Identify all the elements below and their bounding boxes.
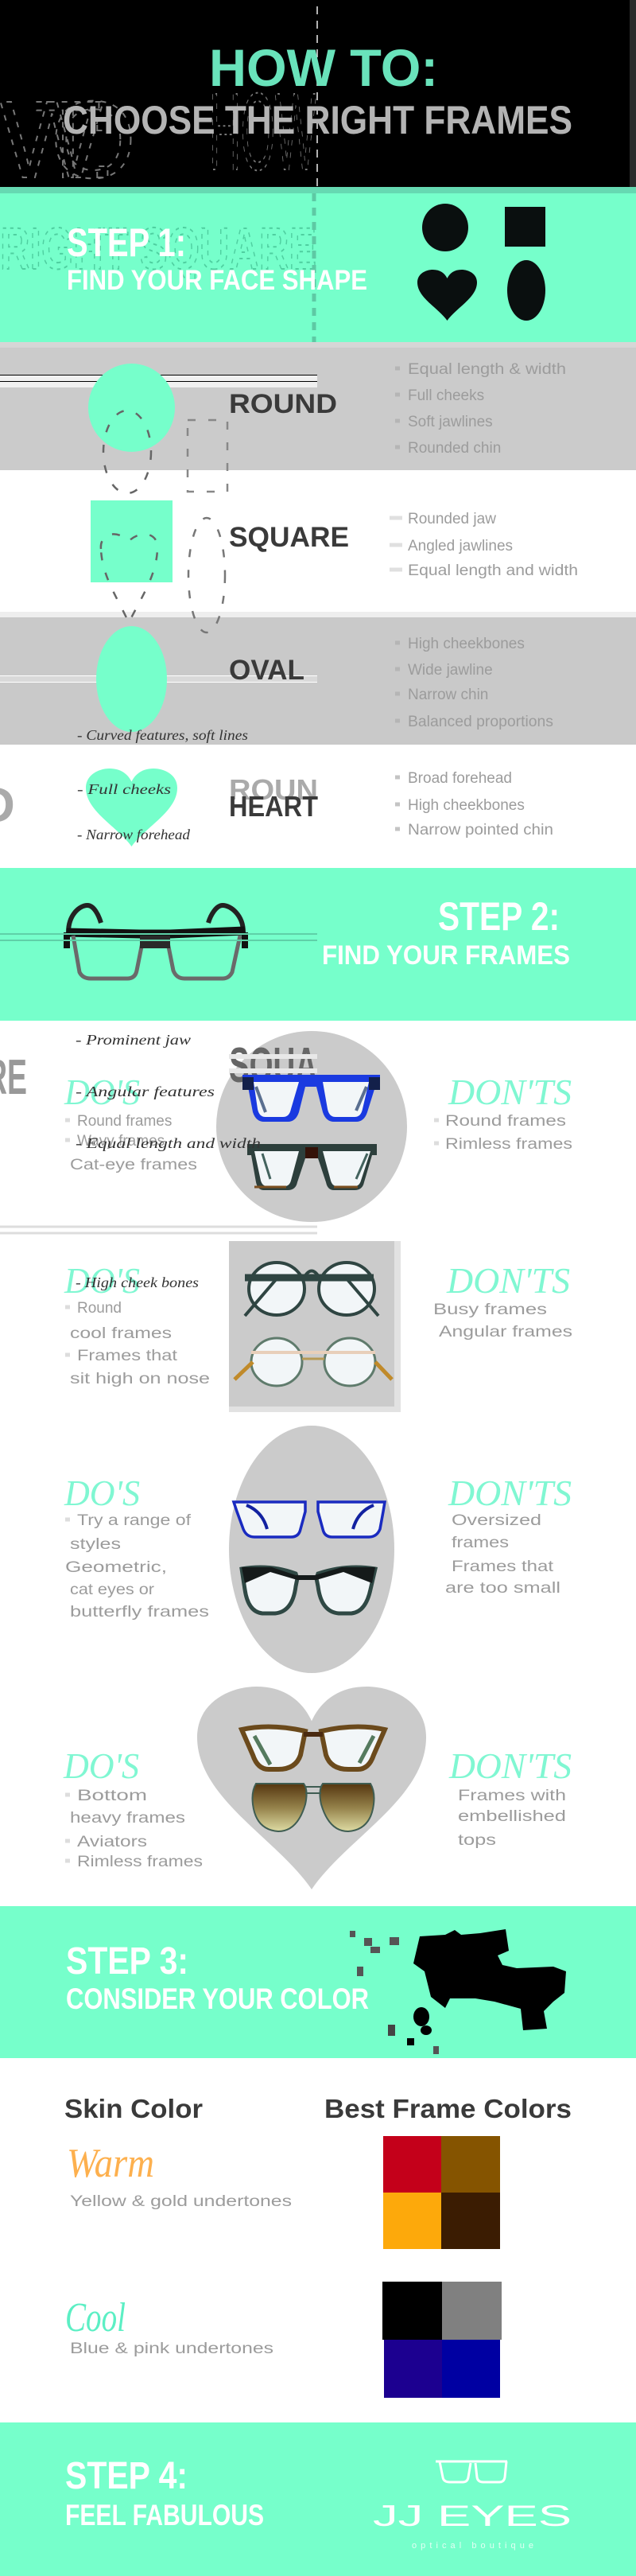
list: donts: Oversized: [452, 1512, 541, 1529]
list: donts: Rimless frames: [445, 1136, 572, 1153]
list: dos: cat eyes or: [70, 1582, 155, 1598]
label: warm: Warm: [67, 2141, 154, 2186]
list: heart traits: Broad forehead: [408, 770, 512, 787]
list: donts: Frames that: [452, 1558, 554, 1575]
heading: donts: DON'TS: [448, 1473, 572, 1513]
list: donts: [458, 1788, 566, 1849]
heading: step 4: STEP 4:: [65, 2455, 188, 2497]
shape: gray heart: [197, 1687, 426, 1889]
subheading: consider your color: CONSIDER YOUR COLOR: [66, 1983, 369, 2015]
glasses: aviators: [253, 1784, 374, 1831]
swatches: cool: [382, 2282, 502, 2398]
list: donts: Round frames: [445, 1113, 566, 1130]
list: round traits: Rounded chin: [408, 440, 501, 457]
heading: best frame colors: Best Frame Colors: [324, 2094, 572, 2123]
subheading: find your frames: FIND YOUR FRAMES: [322, 940, 570, 971]
logo: tagline: optical boutique: [412, 2541, 533, 2551]
list: square traits: Angled jawlines: [408, 538, 513, 555]
list: dos: Try a range of: [77, 1512, 192, 1529]
heading: step 3: STEP 3:: [66, 1940, 188, 1983]
list: dos: Wavy frames: [77, 1133, 165, 1150]
list: round traits: [395, 361, 566, 457]
glasses: tortoise: [247, 1144, 377, 1190]
label: square: SQUARE: [229, 522, 349, 553]
list: round traits: Full cheeks: [408, 387, 484, 404]
panel: square face row: [0, 470, 636, 612]
list: dos: cool frames: [70, 1325, 172, 1342]
ghost label: round: ROUN: [229, 773, 318, 806]
text block: script notes: - Angular features: [76, 1084, 215, 1099]
icon: oval face: [507, 260, 545, 321]
logo: glasses: [436, 2461, 507, 2482]
list: dos: Rimless frames: [77, 1854, 203, 1870]
list: dos: Bottom: [77, 1788, 147, 1804]
subtitle: CHOOSE THE RIGHT FRAMES: [63, 98, 572, 142]
text: stray square label: SQUA: [229, 1038, 317, 1093]
list: square traits: [390, 511, 578, 579]
swatches: warm: [383, 2136, 500, 2249]
list: donts: [433, 1302, 572, 1341]
shape: heart face: [86, 769, 177, 846]
panel: title header: [0, 0, 636, 201]
list: dos: Cat-eye frames: [70, 1157, 197, 1173]
icon: square face: [505, 207, 545, 247]
glasses: dark round: [245, 1263, 378, 1316]
heading: step 1: STEP 1:: [67, 220, 186, 265]
text block: script face notes: - Full cheeks: [77, 781, 171, 797]
list: square traits: Rounded jaw: [408, 511, 496, 527]
list: oval traits: Wide jawline: [408, 662, 493, 679]
list: dos: Round: [77, 1300, 122, 1317]
list: donts: [445, 1512, 560, 1597]
glasses: cat-eye: [242, 1567, 375, 1613]
list: donts: embellished: [458, 1808, 566, 1825]
list: donts: tops: [458, 1832, 496, 1849]
heading: donts: DON'TS: [446, 1260, 570, 1301]
glasses: blue: [242, 1075, 380, 1122]
heading: dos: DO'S: [64, 1473, 140, 1513]
panel: step 4 footer: [0, 2422, 636, 2576]
list: dos: sit high on nose: [70, 1371, 210, 1387]
list: heart traits: Narrow pointed chin: [408, 822, 553, 839]
subheading: find your face shape: FIND YOUR FACE SHAPE: [67, 265, 367, 296]
list: dos: Frames that: [77, 1348, 178, 1364]
list: dos: heavy frames: [70, 1810, 185, 1827]
text block: script notes: - Prominent jaw: [76, 1032, 191, 1048]
list: dos: butterfly frames: [70, 1604, 209, 1621]
list: donts: Busy frames: [433, 1302, 547, 1318]
panel: heart face row: [0, 769, 553, 846]
text block: script notes: [76, 1032, 261, 1151]
panel: square face frames: [0, 1031, 572, 1222]
list: round traits: Soft jawlines: [408, 414, 493, 430]
panel: step 1 banner: [0, 187, 636, 342]
subheading: feel fabulous: FEEL FABULOUS: [65, 2499, 264, 2531]
list: dos: [65, 1788, 203, 1870]
label: cool: Cool: [65, 2295, 126, 2341]
list: round traits: Equal length & width: [408, 361, 566, 378]
heading: donts: DON'TS: [448, 1745, 572, 1786]
divider lines: [0, 1227, 317, 1233]
list: donts: frames: [452, 1535, 509, 1551]
icon: glasses: [67, 905, 245, 979]
title: how to: HOW TO:: [209, 38, 438, 97]
text: stray square label: [229, 1038, 317, 1093]
label: heart: HEART: [229, 790, 318, 823]
text block: script notes: - Equal length and width: [76, 1135, 261, 1151]
heading: step 2: STEP 2:: [438, 894, 560, 939]
list: oval traits: [395, 636, 553, 730]
logo: wordmark: JJ EYES: [373, 2500, 572, 2532]
list: donts: are too small: [445, 1580, 560, 1597]
list: donts: Frames with: [458, 1788, 566, 1804]
script note: - High cheek bones: [76, 1274, 199, 1290]
glasses: tortoise browline: [242, 1726, 385, 1769]
list: dos: styles: [70, 1536, 121, 1553]
text: warm description: Yellow & gold undertones: [70, 2193, 292, 2210]
shape: gray oval: [216, 1031, 407, 1222]
panel: color guide: [64, 2094, 572, 2398]
panel: heart-adjacent oval frames: [64, 1426, 572, 1673]
panel: heart face frames: [63, 1687, 572, 1889]
glasses: gold round: [235, 1338, 392, 1386]
list: oval traits: Narrow chin: [408, 687, 488, 703]
panel: title header: W TO:: [0, 79, 136, 201]
list: dos: [65, 1512, 209, 1621]
list: dos: Aviators: [77, 1834, 147, 1850]
panel: oval face row: [0, 612, 636, 745]
list: oval traits: High cheekbones: [408, 636, 525, 652]
list: heart traits: High cheekbones: [408, 797, 525, 814]
shape: oval face: [96, 626, 167, 732]
list: heart traits: [395, 770, 553, 839]
list: dos: Geometric,: [65, 1559, 167, 1576]
shape: gray rectangle: [229, 1241, 401, 1412]
list: dos: [65, 1300, 210, 1387]
label: round: ROUND: [229, 389, 337, 419]
icon: heart face: [417, 270, 477, 321]
heading: skin color: Skin Color: [64, 2094, 203, 2123]
panel: title header: HOW: [209, 71, 316, 193]
panel: step 1 banner: RIGHT SQUARE: [0, 216, 316, 282]
heading: dos: DO'S: [63, 1745, 139, 1786]
list: dos: Round frames: [77, 1113, 172, 1130]
text block: script face notes: - Curved features, soft lines: [77, 727, 248, 743]
list: square traits: Equal length and width: [408, 562, 578, 579]
text block: script face notes: - Rounded chin: [77, 881, 188, 897]
panel: step 3 banner: [0, 1906, 636, 2058]
list: oval traits: Balanced proportions: [408, 714, 553, 730]
heading: dos: DO'S: [64, 1260, 140, 1301]
icon: paint splatter: [350, 1929, 566, 2054]
panel: oval face frames: [64, 1241, 572, 1412]
shape: gray oval: [229, 1426, 394, 1673]
icon: round face: [422, 204, 468, 251]
text block: script face notes: - Narrow forehead: [77, 827, 191, 842]
text: cool description: Blue & pink undertones: [70, 2341, 273, 2357]
glasses: blue thin: [234, 1502, 385, 1537]
list: dos: [65, 1113, 197, 1173]
shape: round face: [88, 364, 175, 452]
panel: round face row: [0, 342, 636, 470]
panel: step 2 banner: [0, 868, 636, 1021]
text block: script face notes: [77, 727, 248, 897]
label: oval: OVAL: [229, 655, 304, 686]
heading: donts: DON'TS: [448, 1072, 572, 1112]
panel: dashed outline ghosts: [101, 411, 227, 632]
shape: square face: [91, 500, 173, 582]
list: donts: Angular frames: [439, 1324, 572, 1341]
list: donts: [434, 1113, 572, 1153]
heading: dos: DO'S: [64, 1072, 140, 1112]
